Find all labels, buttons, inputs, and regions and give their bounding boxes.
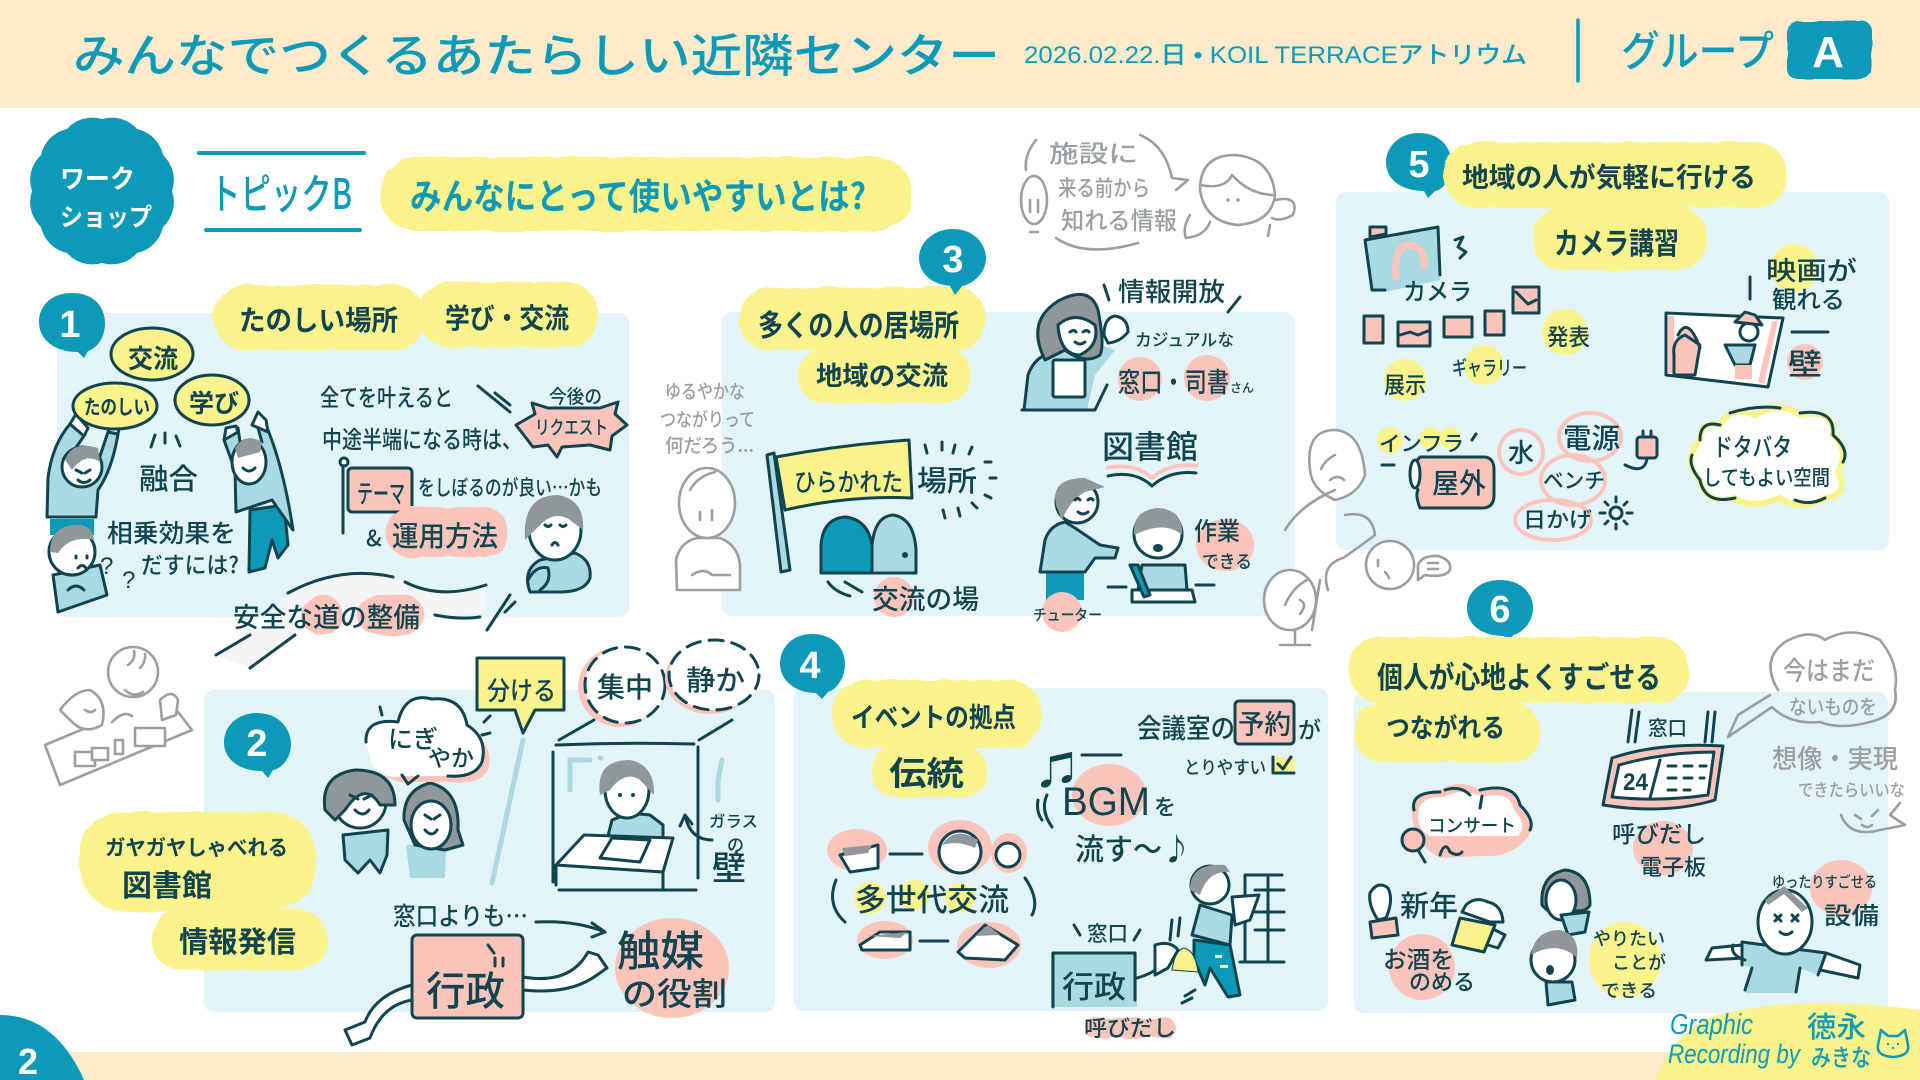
catalyst role: の役割 — [622, 969, 727, 1015]
text: calling display: 電子板 — [1640, 850, 1706, 882]
beer mug icon — [1452, 900, 1505, 952]
pill: learning and exchange: 学び・交流 — [445, 297, 569, 337]
bubble: quiet: 静か — [686, 659, 745, 699]
text: can drink — [1383, 934, 1475, 1000]
text: can work — [1194, 512, 1254, 574]
person raising sign left — [47, 414, 120, 535]
text: relaxing facilities: 設備 — [1824, 896, 1879, 931]
pill: fun place: たのしい場所 — [239, 299, 398, 339]
bubble: lively: やか — [428, 739, 474, 773]
panel 3 background — [722, 312, 1294, 616]
gray bubble: things not yet existing: 今はまだ — [1783, 651, 1875, 688]
bubble: concert — [1402, 784, 1531, 862]
pill: comfortable individually — [1349, 637, 1689, 703]
text: can do what you want — [1589, 922, 1666, 1003]
gray bubble: things not yet existing: 想像・実現 — [1772, 739, 1898, 776]
badge 3: 3 — [942, 239, 964, 281]
circled word: water: 水 — [1508, 433, 1534, 470]
sign: learning — [175, 375, 249, 425]
badge 4: 4 — [799, 645, 821, 687]
government box character: 行政 — [426, 959, 505, 1017]
pill: learning and exchange — [418, 282, 598, 347]
text: counter: 窓口 — [1087, 918, 1128, 948]
gray bubble: things not yet existing — [1728, 632, 1905, 832]
text: play BGM: ♫ — [1040, 740, 1078, 795]
text: watch movies — [1750, 244, 1857, 315]
panel 4 background — [794, 688, 1328, 1011]
gray question: loose connections: つながりって — [660, 405, 755, 432]
text: presentation — [1542, 309, 1590, 355]
text: watch movies: 観れる — [1772, 280, 1845, 315]
signature text: 徳永 — [1807, 1004, 1866, 1046]
pill: fun place — [214, 285, 426, 350]
pill: comfortable individually: 個人が心地よくすごせる — [1377, 653, 1661, 697]
workshop badge: ワーク — [60, 159, 135, 196]
flag: theme — [340, 458, 412, 533]
callout: future request: 今後の — [549, 382, 602, 409]
badge 4 — [780, 634, 845, 699]
text: gallery — [1452, 345, 1527, 385]
bubble: focus: 集中 — [597, 666, 653, 706]
gray pondering person — [676, 468, 740, 590]
text: can drink: のめる — [1409, 965, 1475, 997]
pill: connect — [1354, 703, 1540, 762]
text: wall — [1787, 332, 1828, 384]
highlight: operation method: & — [366, 521, 382, 553]
text: more than a counter: 窓口よりも… — [393, 897, 528, 933]
pill: noisy library: 図書館 — [122, 861, 212, 905]
sign: exchange: 交流 — [128, 339, 178, 376]
pill: many people's place — [739, 287, 985, 350]
pill: connect: つながれる — [1386, 708, 1505, 745]
text: library: 図書館 — [1102, 422, 1198, 468]
panel 6 background — [1354, 692, 1888, 1013]
pill: tradition: 伝統 — [889, 747, 964, 795]
two chatting people — [324, 770, 463, 878]
counter box: government: 行政 — [1062, 962, 1126, 1007]
text: calling display — [1612, 815, 1706, 882]
text: glass wall — [680, 808, 758, 890]
tag: outdoors — [1410, 457, 1494, 508]
sun icon — [1600, 497, 1632, 529]
topic label: トピックB — [210, 161, 352, 222]
gray sketch: people between panels — [1264, 430, 1450, 645]
person sitting with questions — [49, 525, 135, 612]
person raising sign right — [224, 412, 293, 572]
group badge A — [1787, 21, 1872, 79]
bubble: lively — [366, 698, 490, 784]
cat icon — [1878, 1030, 1908, 1057]
text: counter: 窓口 — [1648, 712, 1687, 741]
circled word: bench — [1541, 455, 1605, 505]
movie screen illustration — [1666, 312, 1783, 387]
callout: future request: リクエスト — [535, 413, 608, 440]
bubble: focus — [578, 647, 665, 727]
text: counter — [1074, 918, 1140, 948]
text: relaxing facilities: ゆったりすごせる — [1772, 871, 1877, 892]
date and venue: 2026.02.22.日 • KOIL TERRACEアトリウム — [1024, 42, 1527, 69]
text: wall: 壁 — [1788, 340, 1822, 384]
text: counter and librarian: さん — [1230, 379, 1254, 396]
text: can do what you want: ことが — [1612, 949, 1666, 975]
workshop badge: ショップ — [60, 198, 152, 234]
gray question: loose connections: 何だろう... — [665, 431, 754, 458]
catalyst role — [615, 918, 729, 1018]
header band — [0, 0, 1920, 108]
text: place with rays: 場所 — [917, 458, 977, 500]
text: when everything is half-baked — [320, 378, 522, 455]
circled word: shade: 日かげ — [1523, 504, 1592, 534]
badge 3 — [919, 229, 986, 295]
text: play BGM: を — [1154, 790, 1176, 822]
cloud: lively space — [1691, 407, 1845, 505]
panel 5 — [1336, 133, 1889, 550]
text: gallery: ギャラリー — [1452, 352, 1527, 381]
badge 2 — [224, 713, 291, 778]
text: more than a counter — [393, 897, 605, 937]
text: narrowing down: をしぼるのが良い…かも — [418, 472, 602, 502]
calling display sign — [1603, 710, 1723, 809]
signature text: みきな — [1811, 1038, 1871, 1073]
pill: easy for locals — [1444, 142, 1787, 208]
counter box: government — [1051, 943, 1178, 1007]
text: exhibition: 展示 — [1384, 366, 1426, 400]
pill: camera lessons — [1533, 207, 1707, 270]
text: multigenerational exchange: 多世代交流 — [855, 875, 1009, 920]
safe road illustration: 安全な道の整備 — [233, 596, 420, 635]
sign: fun — [73, 383, 157, 429]
title: みんなでつくるあたらしい近隣センター — [73, 20, 1000, 86]
catalyst role: 触媒 — [617, 918, 704, 979]
text: infrastructure — [1377, 427, 1476, 465]
text: call: 呼びだし — [1084, 1011, 1176, 1043]
text: play BGM: BGM — [1062, 780, 1150, 824]
gray bubble: things not yet existing: ないものを — [1789, 691, 1877, 720]
badge 1 — [39, 293, 105, 358]
text: meeting room reservation: 会議室の — [1137, 707, 1235, 746]
bubble: concert: コンサート — [1428, 812, 1516, 838]
cloud: lively space: ドタバタ — [1713, 428, 1792, 464]
pill: community exchange — [798, 348, 971, 403]
gray note: information before visiting: 来る前から — [1058, 171, 1150, 203]
circled word: water — [1499, 430, 1543, 474]
bubble: lively: にぎ — [388, 720, 438, 756]
text: can drink: お酒を — [1383, 940, 1454, 975]
pill: many people's place: 多くの人の居場所 — [758, 301, 959, 345]
panel 6 — [1349, 580, 1905, 1013]
gray note: information before visiting: 知れる情報 — [1061, 201, 1177, 236]
panel 4 — [780, 634, 1328, 1043]
panel 1 background — [57, 313, 629, 617]
text: synergy question: だすには? — [141, 546, 239, 580]
highlight: operation method — [366, 507, 508, 557]
panel 1 — [39, 282, 629, 668]
gray note: information before visiting — [1021, 134, 1295, 249]
badge 5 — [1386, 133, 1452, 198]
signature text: Graphic — [1670, 1009, 1753, 1041]
text: play BGM — [1038, 740, 1191, 869]
pill: event hub: イベントの拠点 — [851, 696, 1016, 735]
text: can do what you want: やりたい — [1593, 925, 1665, 951]
text: place with rays — [917, 442, 996, 518]
text: glass wall: の — [727, 831, 744, 856]
two people with gifts — [1531, 870, 1590, 1005]
footer band — [0, 1015, 1920, 1080]
new year mochi icon: 新年 — [1400, 883, 1458, 925]
tag: outdoors: 屋外 — [1432, 462, 1486, 502]
open book icon — [1106, 465, 1198, 486]
page number tab — [0, 1015, 84, 1080]
new year mochi icon — [1370, 883, 1458, 938]
flag: open place: ひらかれた — [794, 463, 903, 499]
text: synergy question: 相乗効果を — [107, 514, 236, 550]
person sitting with questions: ? — [122, 567, 135, 594]
gray question: loose connections — [660, 377, 755, 458]
gray note: information before visiting: 施設に — [1049, 134, 1138, 169]
sign: learning: 学び — [189, 384, 239, 420]
text: synergy question — [107, 514, 239, 580]
gray sketch: people around table — [45, 647, 192, 785]
circled word: shade — [1515, 500, 1592, 540]
sign: separate — [477, 658, 564, 733]
tutor and student — [1040, 478, 1214, 602]
pill: noisy library — [79, 812, 316, 912]
sign: fun: たのしい — [84, 391, 150, 420]
text: calling display: 呼びだし — [1612, 815, 1706, 849]
text: when everything is half-baked: 中途半端になる時は、 — [322, 420, 522, 455]
text: casual: カジュアルな — [1135, 326, 1234, 351]
person sitting with questions: ? — [100, 553, 113, 580]
highlight: operation method: 運用方法 — [392, 515, 498, 555]
relaxed person — [1706, 886, 1860, 993]
panel 2 background — [204, 690, 775, 1012]
workshop badge — [30, 118, 174, 264]
text: presentation: 発表 — [1547, 318, 1590, 352]
panel 2 — [79, 640, 775, 1045]
calling display sign: 24 — [1623, 769, 1649, 796]
panel 3 — [660, 229, 1294, 632]
gray question: loose connections: ゆるやかな — [665, 377, 745, 404]
text: when everything is half-baked: 全てを叶えると — [320, 378, 453, 413]
bubble: quiet — [665, 640, 759, 714]
topic question — [380, 157, 912, 231]
badge 1: 1 — [59, 304, 81, 346]
text: tutor — [1033, 592, 1102, 632]
signature corner — [1655, 1003, 1920, 1080]
signature text: Recording by — [1668, 1039, 1801, 1069]
pill: camera lessons: カメラ講習 — [1554, 219, 1679, 263]
signature text — [1668, 1004, 1871, 1073]
text: infrastructure: インフラ — [1379, 428, 1464, 458]
sign: separate: 分ける — [487, 671, 556, 708]
text: glass wall: ガラス — [709, 808, 758, 832]
text: can do what you want: できる — [1601, 977, 1657, 1003]
person ringing bell — [1170, 865, 1284, 1003]
flag: theme: テーマ — [357, 474, 405, 511]
badge 2: 2 — [246, 723, 268, 765]
text: relaxing facilities — [1772, 860, 1879, 931]
gray bubble: things not yet existing: できたらいいな — [1798, 776, 1905, 801]
badge 6 — [1467, 580, 1533, 644]
circled word: bench: ベンチ — [1543, 465, 1605, 495]
cloud: lively space: してもよい空間 — [1703, 462, 1830, 492]
group badge A: A — [1812, 28, 1844, 77]
topic question: みんなにとって使いやすいとは? — [410, 168, 866, 220]
gallery photos — [1364, 287, 1539, 346]
plug icon — [1625, 431, 1657, 469]
open door illustration — [821, 515, 916, 596]
pill: community exchange: 地域の交流 — [816, 356, 948, 393]
government box character — [345, 935, 607, 1045]
text: fusion: 融合 — [139, 456, 198, 498]
text: exchange space: 交流の場 — [872, 578, 979, 617]
text: meeting room reservation: とりやすい — [1184, 754, 1266, 780]
text: can work: 作業 — [1194, 512, 1240, 548]
text: meeting room reservation: が — [1298, 711, 1321, 745]
safe road illustration — [216, 573, 515, 668]
text: play BGM: 流す〜♪ — [1075, 825, 1191, 869]
pill: information sharing: 情報発信 — [179, 919, 296, 961]
person thinking — [525, 495, 590, 592]
text: glass wall: 壁 — [712, 841, 746, 890]
text: meeting room reservation: 予約 — [1238, 703, 1291, 742]
sign: exchange — [111, 328, 193, 380]
pill: event hub — [832, 680, 1042, 748]
badge 5: 5 — [1408, 144, 1430, 186]
text: meeting room reservation — [1137, 701, 1321, 780]
waving librarian — [1022, 294, 1128, 410]
group label: グループ — [1621, 18, 1774, 79]
flag: open place — [767, 440, 912, 572]
glass booth with person — [553, 720, 732, 890]
text: counter and librarian: 窓口・司書 — [1118, 361, 1229, 400]
multigenerational faces — [827, 820, 1027, 968]
pill: information sharing — [152, 910, 327, 970]
text: can work: できる — [1202, 548, 1252, 574]
panel 5 background — [1336, 192, 1889, 550]
text: tutor: チューター — [1033, 604, 1102, 625]
text: camera: カメラ — [1403, 272, 1472, 307]
badge 6: 6 — [1489, 589, 1511, 631]
pill: tradition — [871, 746, 987, 797]
callout: future request — [516, 382, 627, 457]
pill: noisy library: ガヤガヤしゃべれる — [105, 832, 288, 862]
text: information disclosure: 情報開放 — [1118, 272, 1225, 309]
circled word: power: 電源 — [1563, 417, 1620, 457]
pill: easy for locals: 地域の人が気軽に行ける — [1462, 156, 1756, 195]
camera icon — [1365, 227, 1466, 292]
text: watch movies: 映画が — [1766, 251, 1857, 288]
